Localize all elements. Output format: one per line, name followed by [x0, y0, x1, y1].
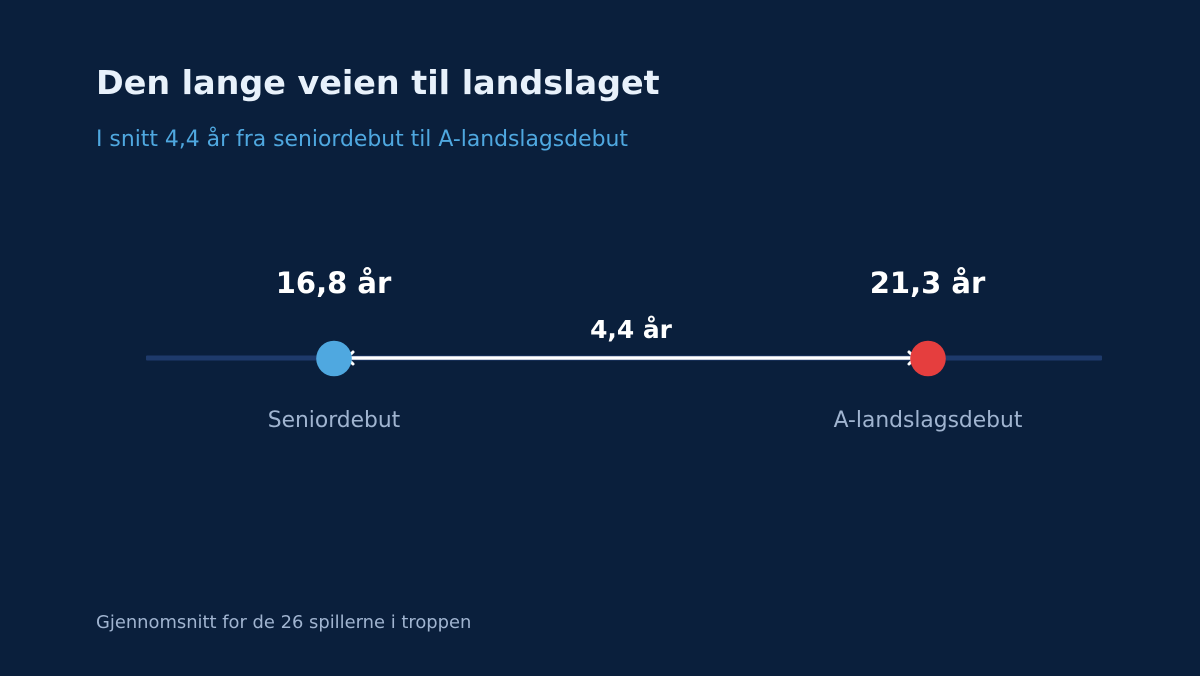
- duration label: 4,4 år: [590, 315, 673, 344]
- label: A-landslagsdebut: A-landslagsdebut: [834, 408, 1023, 433]
- subtitle: I snitt 4,4 år fra seniordebut til A-landslagsdebut: [96, 126, 628, 152]
- title: Den lange veien til landslaget: [96, 63, 660, 102]
- duration arrow: [345, 352, 917, 364]
- marker: A-landslagsdebut: [910, 341, 946, 376]
- timeline chart: [146, 266, 1102, 433]
- footnote: Gjennomsnitt for de 26 spillerne i troppen: [96, 612, 471, 633]
- value: A-landslagsdebut age: 21,3 år: [870, 266, 986, 300]
- timeline base line: [146, 356, 1102, 360]
- marker: seniordebut: [316, 341, 352, 376]
- value: seniordebut age: 16,8 år: [276, 266, 392, 300]
- label: seniordebut: Seniordebut: [268, 408, 401, 433]
